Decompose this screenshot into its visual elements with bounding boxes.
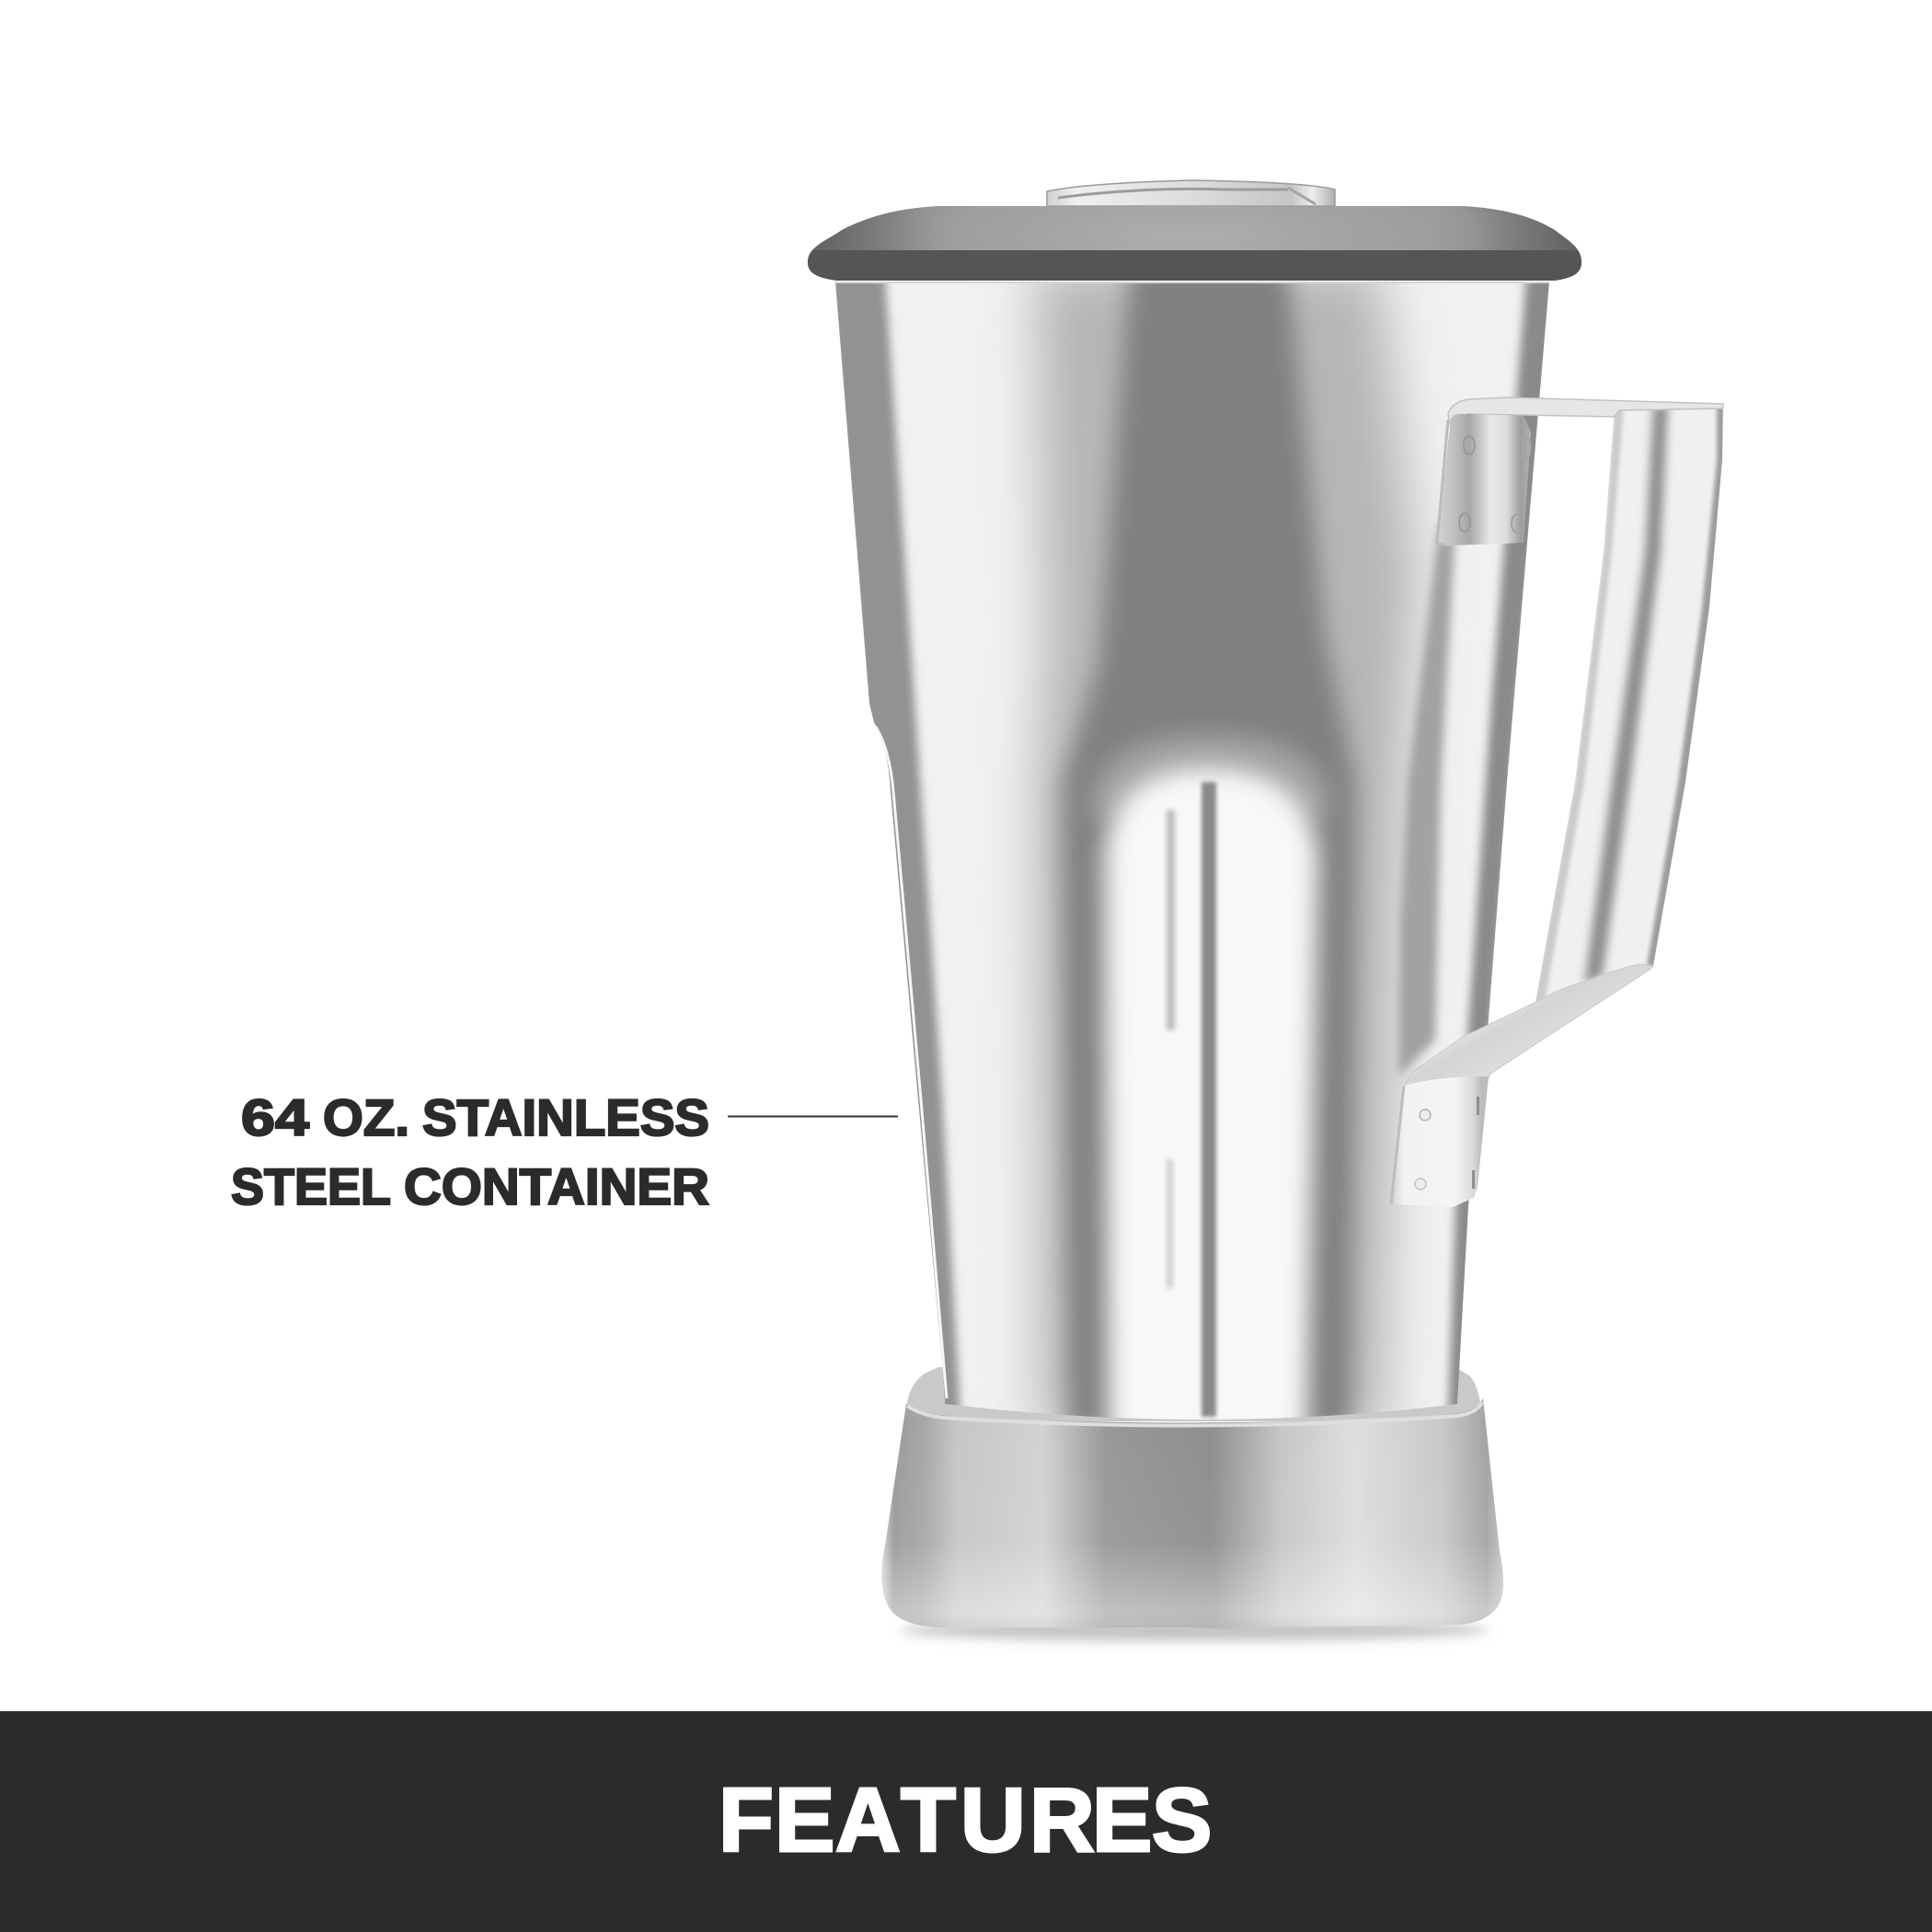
- upper bracket: [1437, 414, 1531, 546]
- callout: container label: STEEL: [231, 1157, 391, 1215]
- lid knob: [1047, 180, 1335, 206]
- lower arm: [1403, 964, 1653, 1090]
- callout: container label: 64: [241, 1088, 309, 1146]
- callout: container label: CONTAINER: [404, 1157, 709, 1215]
- handle top bar: [1448, 397, 1723, 432]
- handle: [1391, 397, 1726, 1207]
- lid: [808, 206, 1581, 281]
- base back rim: [906, 1365, 1483, 1421]
- callout: container label: STAINLESS: [422, 1088, 709, 1146]
- base shadow: [900, 1619, 1489, 1641]
- stainless steel body: [828, 267, 1564, 1454]
- footer band: [0, 1711, 1932, 1932]
- callout: container label: [231, 1088, 898, 1215]
- heading: features: FEATURES: [719, 1769, 1212, 1870]
- handle grip: [1533, 405, 1726, 1007]
- callout: container label: OZ.: [323, 1088, 409, 1146]
- lower bracket: [1391, 1076, 1489, 1207]
- base front: [881, 1398, 1503, 1628]
- blender container: [800, 180, 1726, 1641]
